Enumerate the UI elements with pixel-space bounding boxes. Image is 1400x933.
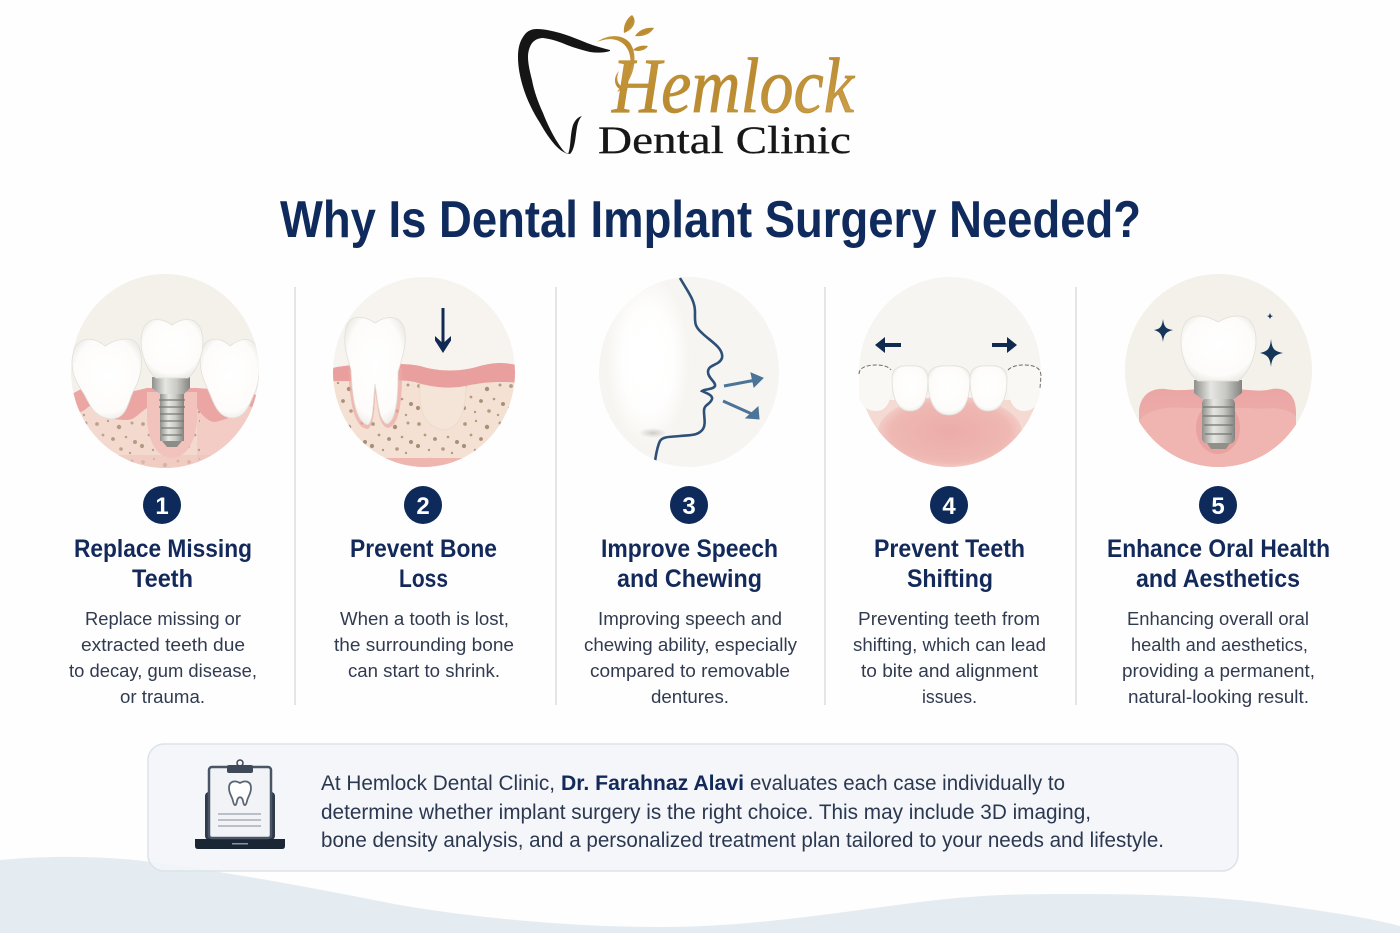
- icon: sparkles: [1154, 313, 1283, 367]
- description: or trauma.: [120, 686, 205, 707]
- panel: prevent teeth shifting: [853, 275, 1046, 707]
- icon: clipboard on laptop: [195, 760, 285, 849]
- description: [334, 608, 514, 681]
- teeth row: [859, 365, 1041, 415]
- description: to decay, gum disease,: [69, 660, 257, 681]
- column dividers: [295, 287, 1076, 705]
- illustration: bone shrinkage: [330, 275, 520, 470]
- logo: tooth outline: [518, 29, 610, 154]
- logo: [518, 15, 855, 162]
- description: Preventing teeth from: [858, 608, 1040, 629]
- description: When a tooth is lost,: [340, 608, 509, 629]
- panel: replace missing teeth: [65, 270, 265, 707]
- dashed outlines of shifted teeth: [859, 365, 1041, 388]
- icon: down arrow: [435, 308, 451, 353]
- panel: enhance oral health and aesthetics: [1107, 270, 1330, 707]
- heading: Teeth: [132, 565, 193, 593]
- number badge 5: 5: [1211, 493, 1225, 520]
- heading: [74, 535, 252, 593]
- description: chewing ability, especially: [584, 634, 798, 655]
- logo: gold swash and leaves: [597, 15, 654, 92]
- logo: Dental Clinic: Dental Clinic: [598, 119, 851, 162]
- description: [1122, 608, 1315, 707]
- heading: and Chewing: [617, 565, 762, 593]
- number badge 4: 4: [942, 493, 956, 520]
- description: issues.: [922, 686, 977, 707]
- callout text: bone density analysis, and a personalized treatment plan tailored to your needs and lifestyle.: [321, 829, 1164, 852]
- description: [69, 608, 257, 707]
- title: Why Is Dental Implant Surgery Needed?: [280, 191, 1141, 249]
- number badge 3: [670, 486, 708, 524]
- heading: Shifting: [907, 565, 993, 593]
- number badge 2: 2: [416, 493, 430, 520]
- number badge 4: [930, 486, 968, 524]
- callout text: determine whether implant surgery is the right choice. This may include 3D imaging,: [321, 801, 1091, 824]
- description: extracted teeth due: [81, 634, 245, 655]
- illustration: finished implant: [1120, 270, 1320, 470]
- heading: [1107, 535, 1330, 593]
- heading: [601, 535, 778, 593]
- description: the surrounding bone: [334, 634, 514, 655]
- description: shifting, which can lead: [853, 634, 1046, 655]
- icon: left and right arrows: [875, 337, 1017, 353]
- description: health and aesthetics,: [1131, 634, 1308, 655]
- panel: improve speech and chewing: [584, 275, 798, 707]
- callout text: Dr. Farahnaz Alavi: [561, 772, 744, 795]
- heading: Enhance Oral Health: [1107, 535, 1330, 563]
- description: dentures.: [651, 686, 729, 707]
- description: can start to shrink.: [348, 660, 500, 681]
- number badge 3: 3: [682, 493, 696, 520]
- illustration: shifting teeth: [855, 275, 1045, 470]
- heading: Prevent Teeth: [874, 535, 1025, 563]
- callout text: At Hemlock Dental Clinic,: [321, 772, 555, 795]
- background wave: [0, 857, 1400, 933]
- heading: Improve Speech: [601, 535, 778, 563]
- heading: [874, 535, 1025, 593]
- callout text: [321, 772, 1164, 852]
- number badge 1: 1: [155, 493, 169, 520]
- description: compared to removable: [590, 660, 790, 681]
- callout: [148, 744, 1238, 871]
- callout text: evaluates each case individually to: [750, 772, 1065, 795]
- logo: Hemlock wordmark: Hemlock: [611, 42, 855, 129]
- callout box: [148, 744, 1238, 871]
- illustration: implant between teeth: [65, 270, 265, 470]
- heading: Prevent Bone: [350, 535, 497, 563]
- description: Replace missing or: [85, 608, 241, 629]
- description: [584, 608, 798, 707]
- heading: and Aesthetics: [1136, 565, 1300, 593]
- heading: Replace Missing: [74, 535, 252, 563]
- icon: speech arrows: [723, 373, 763, 419]
- heading: Loss: [399, 565, 448, 593]
- illustration: face profile: [595, 275, 785, 470]
- number badge 5: [1199, 486, 1237, 524]
- number badge 2: [404, 486, 442, 524]
- description: to bite and alignment: [861, 660, 1038, 681]
- number badge 1: [143, 486, 181, 524]
- description: natural-looking result.: [1128, 686, 1309, 707]
- panel: prevent bone loss: [330, 275, 520, 681]
- heading: [350, 535, 497, 593]
- description: [853, 608, 1046, 707]
- description: Improving speech and: [598, 608, 782, 629]
- description: Enhancing overall oral: [1127, 608, 1309, 629]
- description: providing a permanent,: [1122, 660, 1315, 681]
